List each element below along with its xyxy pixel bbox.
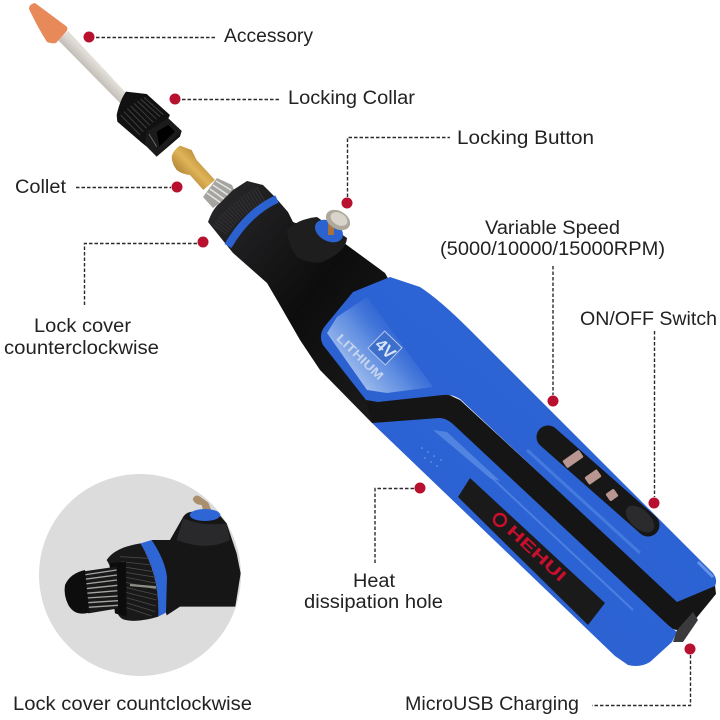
locking collar xyxy=(117,92,182,157)
label: Lock cover counterclockwise: Lock cover xyxy=(34,316,132,337)
accessory: grinding bit xyxy=(29,3,128,103)
end sheen xyxy=(698,562,713,577)
lower highlight xyxy=(433,430,500,481)
inset boss shading xyxy=(177,518,230,546)
label: Locking Collar: Locking Collar xyxy=(288,88,416,109)
LITHIUM mark: LITHIUM xyxy=(334,331,386,383)
inset circle: lock cover detail xyxy=(39,474,241,676)
label: MicroUSB Charging xyxy=(405,644,696,715)
label: Lock cover counterclockwise: counterclockwise xyxy=(4,338,159,359)
inset blue seat xyxy=(190,509,220,521)
lower blue shell xyxy=(372,418,677,666)
label: ON/OFF Switch xyxy=(580,309,717,508)
label: Lock cover counterclockwise xyxy=(4,236,208,359)
blue button seat xyxy=(311,215,347,247)
accessory cone xyxy=(29,3,68,43)
label: Accessory xyxy=(84,26,314,47)
upper shell sheen xyxy=(527,450,640,553)
label: Heat dissipation hole xyxy=(304,482,443,613)
charging port xyxy=(673,612,698,642)
speed control panel xyxy=(548,437,648,525)
tool body xyxy=(208,181,716,666)
label: Heat dissipation hole: dissipation hole xyxy=(304,592,443,613)
label: Accessory: Accessory xyxy=(224,26,314,47)
collet xyxy=(172,146,215,190)
label: Variable Speed: Variable Speed xyxy=(485,218,620,239)
label: Heat dissipation hole: Heat xyxy=(353,571,396,592)
battery badge xyxy=(334,331,402,383)
label: ON/OFF Switch: ON/OFF Switch xyxy=(580,309,717,330)
label: Locking Button: Locking Button xyxy=(457,128,594,149)
blue band xyxy=(228,199,277,246)
label: Collet: Collet xyxy=(15,177,67,198)
inset collar neck xyxy=(109,562,127,617)
black strip and end cap xyxy=(366,394,716,632)
logo text: HEHUI xyxy=(503,522,569,585)
inset collar knurl xyxy=(85,567,118,614)
button pin and head xyxy=(322,206,354,235)
lower sheen line xyxy=(490,476,633,610)
knurled ring xyxy=(220,194,262,230)
black grip and neck xyxy=(208,181,400,423)
label: MicroUSB Charging: MicroUSB Charging xyxy=(405,694,579,715)
logo mark xyxy=(494,514,506,526)
speed indicator lights xyxy=(562,450,619,502)
on/off switch button xyxy=(621,501,659,537)
upper blue shell xyxy=(321,277,716,602)
inset handle xyxy=(152,512,241,615)
accessory shaft xyxy=(58,31,128,103)
inset button pin xyxy=(192,496,211,510)
caption: Lock cover countclockwise: Lock cover countclockwise xyxy=(13,694,252,715)
inset nose xyxy=(65,570,89,614)
highlight plate xyxy=(327,297,433,393)
threaded spindle xyxy=(203,178,235,208)
inset knurled ring xyxy=(107,543,158,621)
4V mark: 4V xyxy=(371,335,400,363)
inset blue band xyxy=(141,540,167,617)
label: Collet xyxy=(15,177,182,198)
button boss xyxy=(287,217,347,262)
logo plate xyxy=(458,478,605,625)
label: Variable Speed: (5000/10000/15000RPM) xyxy=(440,239,665,260)
grey disc xyxy=(39,474,241,676)
heat dissipation holes xyxy=(421,447,442,467)
label: Locking Collar xyxy=(170,88,416,109)
label: Locking Button xyxy=(342,128,594,208)
label: Variable Speed xyxy=(440,218,665,406)
